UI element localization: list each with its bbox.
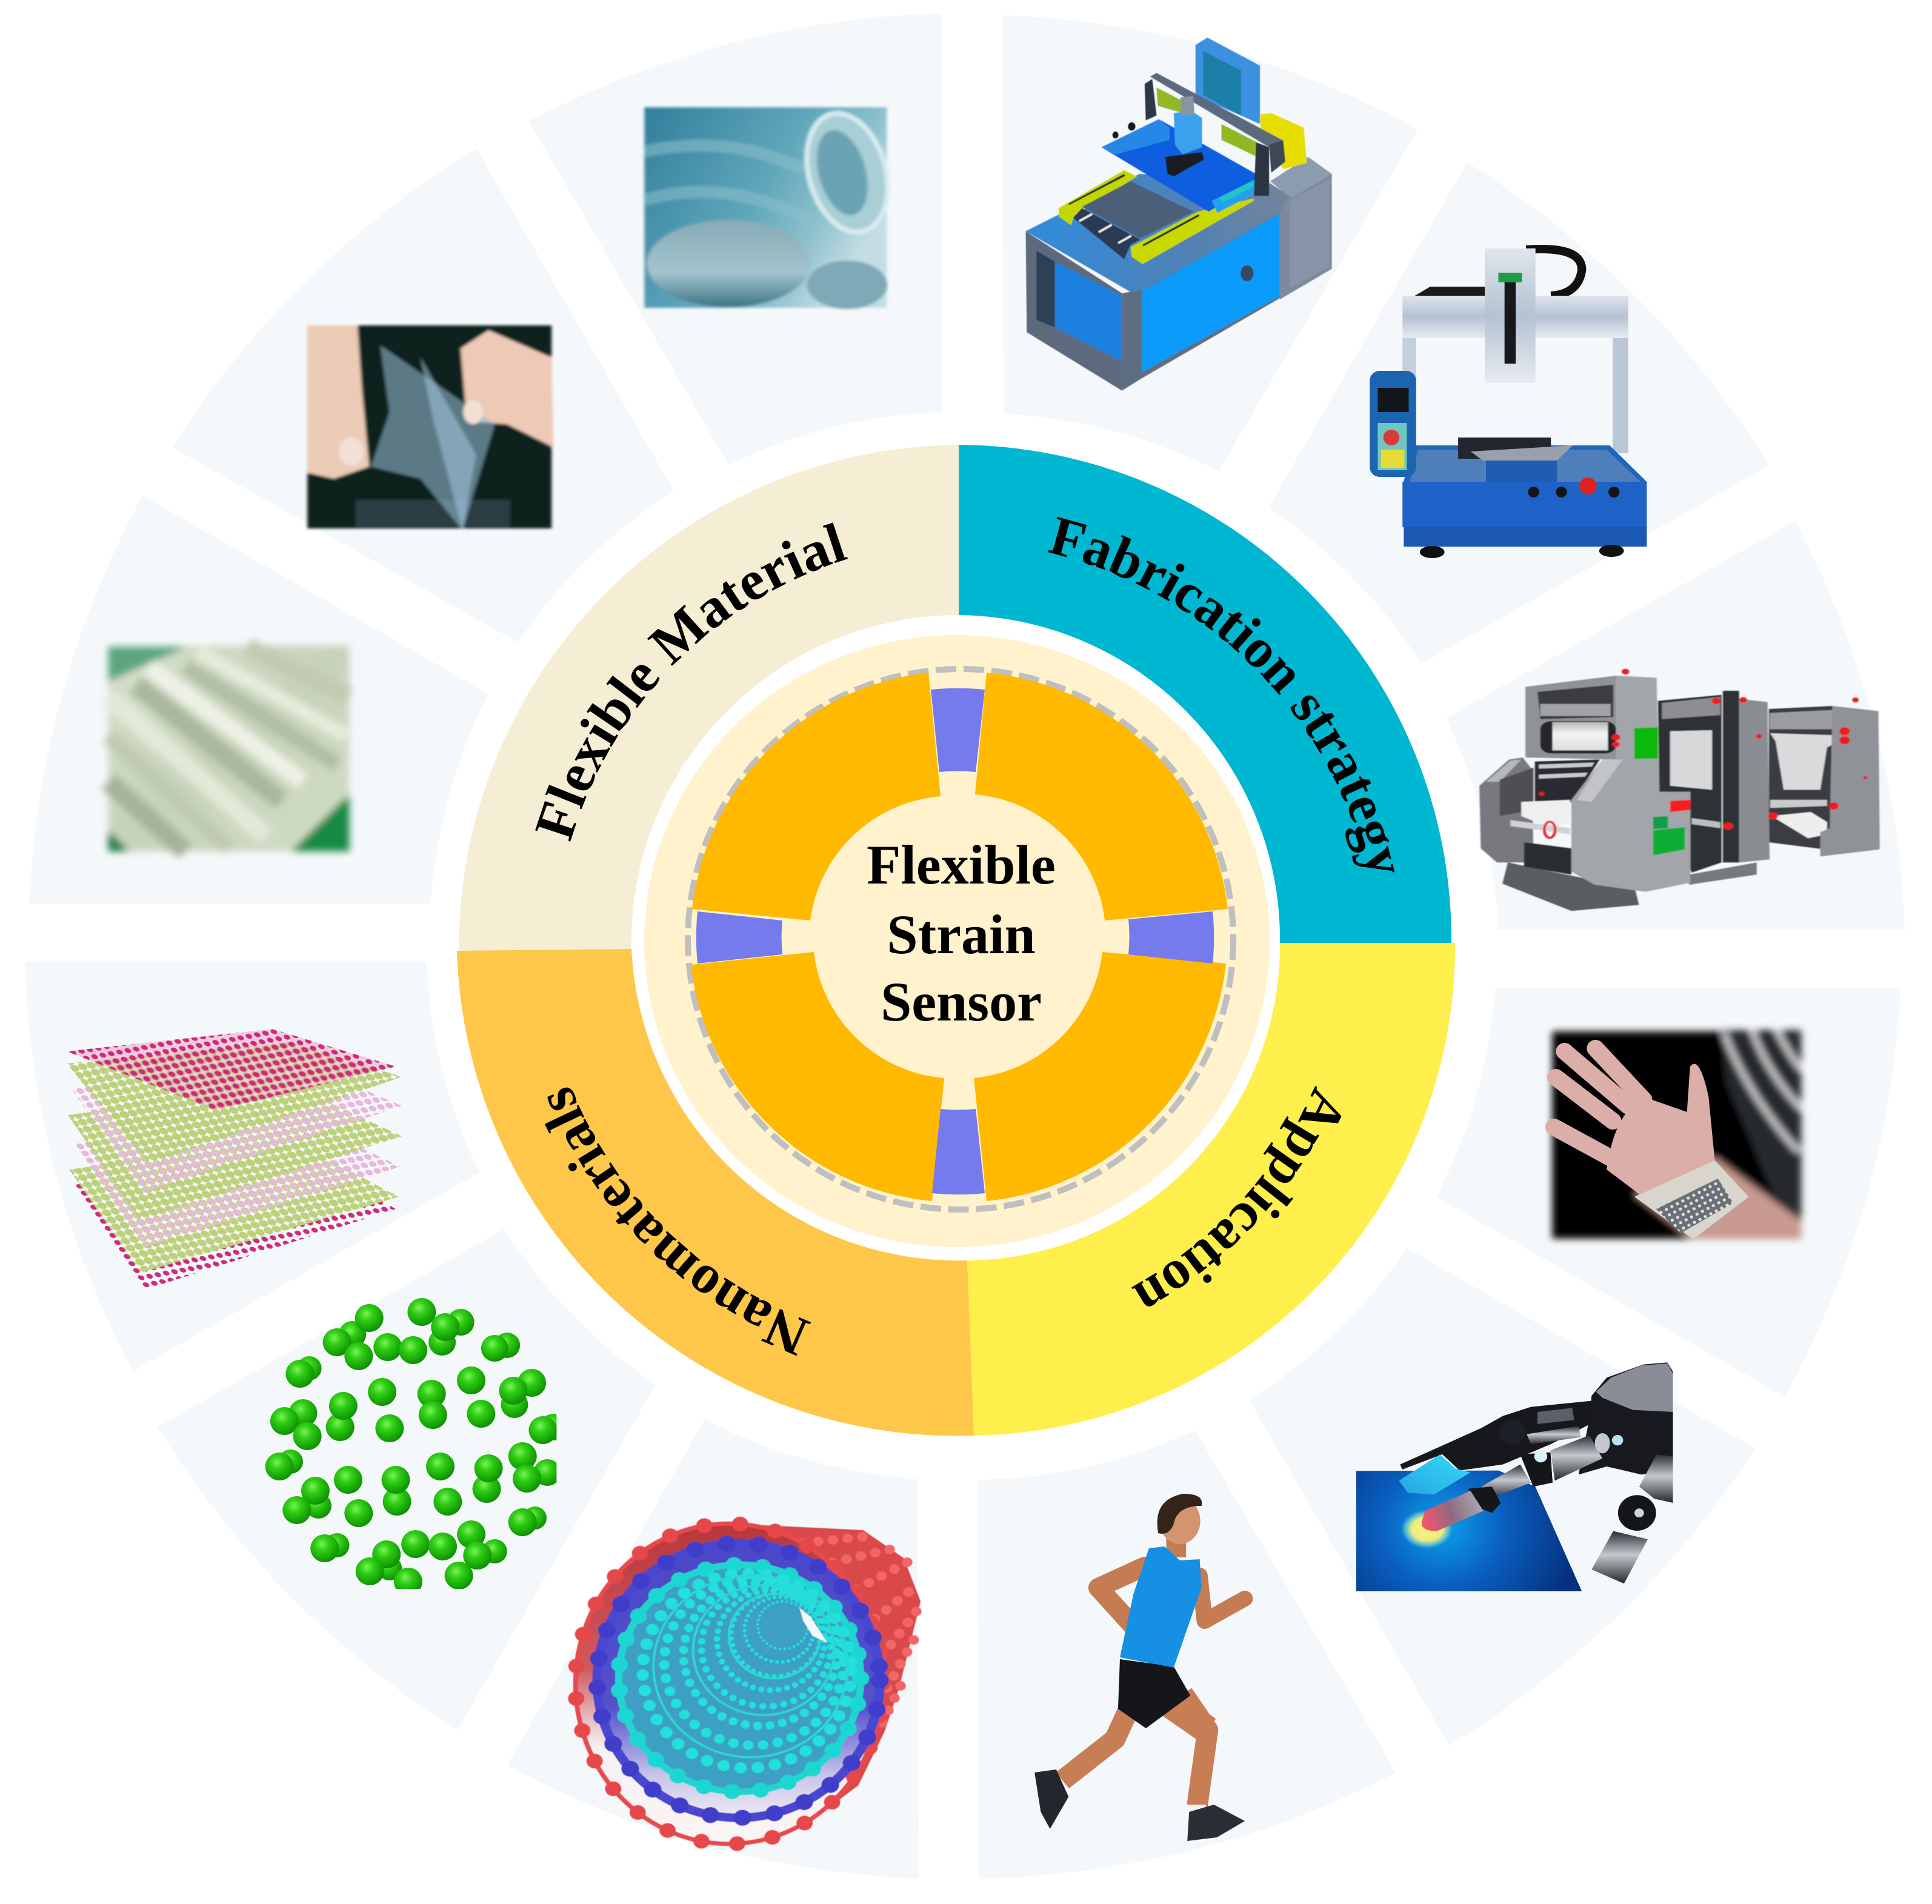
core: flexible strain sensor hub (644, 635, 1270, 1247)
segment: orange bottom left (691, 952, 944, 1201)
segment: purple bottom (932, 1109, 985, 1194)
panel: nanomaterials, nanotube (507, 1419, 921, 1879)
panel: application, runner (978, 1430, 1396, 1879)
panel: fabrication strategy, dispensing robot (1268, 162, 1769, 664)
label: flexible material: Flexible Material (535, 522, 848, 842)
icon: screen printing machine (1025, 38, 1332, 391)
quadrant: flexible material (459, 445, 959, 951)
label: fabrication strategy: Fabrication strategy (1048, 516, 1395, 873)
icon: polymer film sheets (108, 645, 350, 851)
panel: nanomaterials, layered 2D material (25, 962, 479, 1371)
icon: layered lattice stack (67, 1029, 402, 1290)
segment: orange bottom right (974, 952, 1226, 1201)
icon: roll to roll machine (1479, 669, 1880, 911)
panel: application, wrist sensor (1436, 988, 1900, 1397)
icon: green nanoparticles (265, 1298, 567, 1596)
icon: robotic hand touching sensor (1356, 1362, 1673, 1591)
panel: flexible material, rolled film (29, 496, 488, 904)
icon: wrist band on hand (1552, 1030, 1801, 1239)
label: nanomaterials: Nanomaterials (545, 1087, 811, 1356)
panel: fabrication strategy, roll to roll machine (1446, 521, 1905, 930)
quadrant: nanomaterials (457, 949, 974, 1436)
panel: flexible material, peeled film (172, 148, 674, 642)
title: flexible strain sensor: Strain (887, 904, 1036, 965)
segment: purple right (1128, 911, 1214, 964)
segment: orange top left (692, 673, 941, 920)
panel: fabrication strategy, screen printer (1002, 15, 1418, 471)
icon: dispensing robot (1370, 248, 1647, 558)
quadrant: fabrication strategy (959, 445, 1451, 943)
quadrant: application (967, 943, 1455, 1436)
segment: purple top (931, 688, 985, 772)
label: application: Application (1131, 1086, 1342, 1307)
panel: flexible material, PDMS droplet (529, 13, 942, 465)
title: flexible strain sensor: Sensor (881, 971, 1042, 1033)
icon: multi-walled carbon nanotube (576, 1523, 921, 1844)
title: flexible strain sensor: Flexible (867, 834, 1056, 896)
icon: silicone droplet and bottle (644, 104, 900, 309)
icon: running man (1034, 1494, 1245, 1841)
segment: purple left (696, 911, 782, 964)
segment: orange top right (975, 673, 1228, 920)
icon: hands holding thin film (307, 325, 553, 530)
panel: application, robotic hand (1249, 1248, 1755, 1745)
panel: nanomaterials, nanoparticles (158, 1229, 656, 1730)
